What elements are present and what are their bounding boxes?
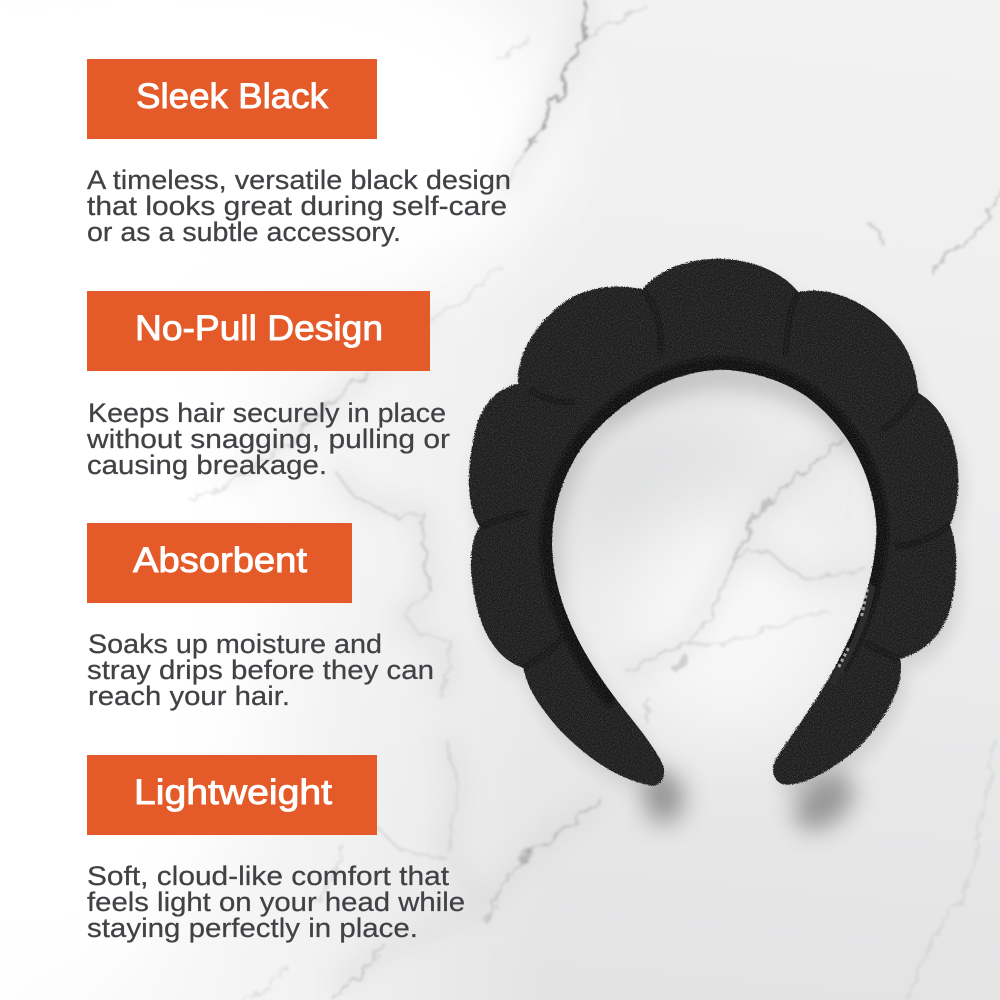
text: no-pull description xyxy=(86,398,450,480)
text: sleek black description: A timeless, versatile black design xyxy=(87,165,511,195)
heading: no-pull design: No-Pull Design xyxy=(135,309,383,348)
text: absorbent description: stray drips before they can xyxy=(87,655,434,685)
heading: sleek black: Sleek Black xyxy=(136,77,329,116)
text: lightweight description: Soft, cloud-like comfort that xyxy=(87,861,450,891)
seams between puffs xyxy=(480,289,950,668)
text: lightweight description xyxy=(87,861,465,943)
heading: absorbent: Absorbent xyxy=(133,541,307,580)
terry texture xyxy=(469,259,958,786)
heading: lightweight xyxy=(87,755,377,835)
heading: lightweight: Lightweight xyxy=(134,773,332,812)
panel: lightweight xyxy=(87,755,465,943)
text: no-pull description: without snagging, pulling or xyxy=(86,424,450,454)
heading: no-pull design xyxy=(87,291,430,371)
heading: absorbent xyxy=(87,523,352,603)
headband xyxy=(469,259,958,786)
headband shadow xyxy=(474,269,963,841)
text: lightweight description: staying perfectly in place. xyxy=(87,913,418,943)
panel: absorbent xyxy=(87,523,434,711)
text: sleek black description: or as a subtle accessory. xyxy=(87,217,401,247)
text: absorbent description: Soaks up moisture and xyxy=(88,629,382,659)
heading: sleek black xyxy=(87,59,377,139)
text: sleek black description: that looks great during self-care xyxy=(87,191,507,221)
text: absorbent description: reach your hair. xyxy=(88,681,290,711)
care label xyxy=(829,582,875,686)
text: sleek black description xyxy=(87,165,511,247)
panel: no-pull design xyxy=(86,291,450,480)
text: lightweight description: feels light on your head while xyxy=(87,887,465,917)
text: no-pull description: Keeps hair securely in place xyxy=(88,398,446,428)
text: absorbent description xyxy=(87,629,434,711)
text: no-pull description: causing breakage. xyxy=(87,450,327,480)
inner band xyxy=(552,370,877,700)
panel: sleek black xyxy=(87,59,511,247)
